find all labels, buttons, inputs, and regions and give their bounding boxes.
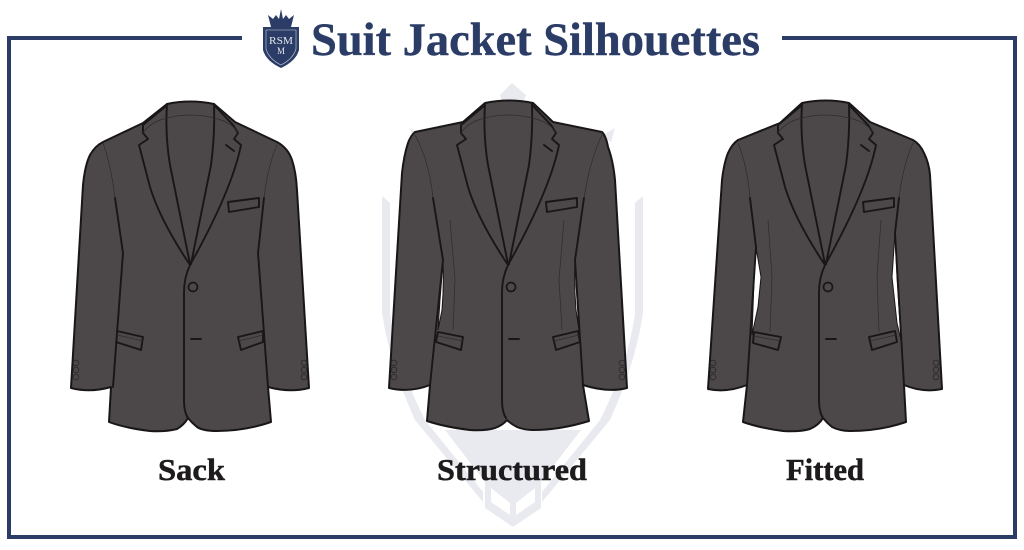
logo monogram	[269, 36, 293, 56]
collar and lapels	[457, 104, 559, 418]
button	[506, 282, 516, 292]
label: sack: Sack	[158, 452, 226, 487]
logo shield	[263, 27, 299, 68]
sleeve seams	[415, 135, 602, 198]
darts	[768, 220, 881, 332]
hip pockets	[753, 331, 897, 350]
collar and lapels	[139, 104, 241, 418]
logo monogram: RSM	[269, 36, 293, 47]
logo crown	[268, 9, 294, 27]
title: Suit Jacket Silhouettes	[311, 14, 760, 66]
underarm gaps	[438, 262, 579, 330]
jacket: structured	[389, 100, 627, 430]
cuff buttons	[73, 360, 307, 380]
neck seam	[143, 115, 238, 133]
chest pocket	[228, 198, 259, 212]
button	[188, 282, 198, 292]
button	[824, 282, 832, 292]
jacket: fitted	[708, 100, 942, 431]
logo monogram: M	[277, 46, 285, 56]
silhouette	[708, 100, 942, 431]
darts	[450, 220, 564, 330]
chest pocket	[863, 198, 894, 212]
silhouette	[389, 100, 627, 430]
collar and lapels	[774, 104, 876, 418]
silhouette	[71, 102, 309, 431]
jacket: sack	[71, 102, 309, 431]
sleeve seams	[738, 143, 913, 198]
sleeve seams	[103, 143, 277, 198]
header logo: crest	[263, 9, 299, 68]
hip pockets	[116, 331, 263, 350]
underarm gaps	[752, 233, 901, 340]
logo shield inner line	[266, 30, 296, 65]
watermark shield	[382, 83, 643, 527]
label: fitted: Fitted	[786, 452, 864, 487]
hip pockets	[436, 331, 580, 350]
cuff buttons	[391, 360, 625, 380]
chest pocket	[546, 198, 577, 212]
neck seam	[778, 115, 873, 133]
neck seam	[461, 115, 556, 133]
label: structured: Structured	[437, 452, 587, 487]
cuff buttons	[710, 360, 939, 380]
